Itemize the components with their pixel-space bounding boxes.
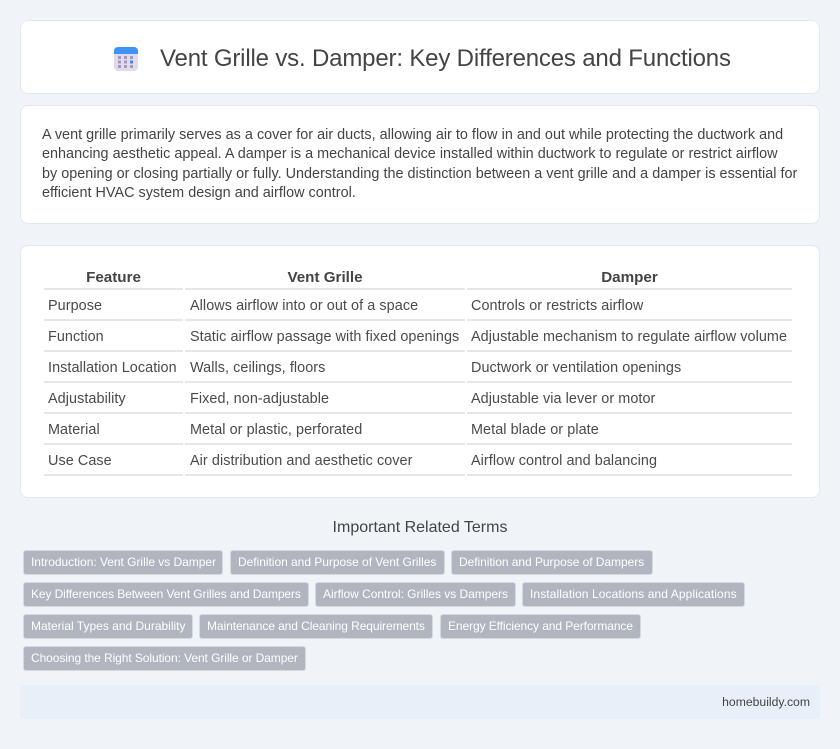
chip: Key Differences Between Vent Grilles and Dampers (31, 587, 301, 601)
chip (230, 550, 445, 575)
chip: Energy Efficiency and Performance (448, 619, 633, 633)
table row: Use Case: Air distribution and aesthetic cover (190, 453, 412, 469)
text block: introduction paragraph: enhancing aesthetic appeal. A damper is a mechanical device installed within ductwork to regulate or restrict airflow (42, 146, 778, 162)
table header: Feature: Feature (86, 269, 141, 286)
icon: calendar (114, 47, 138, 71)
chip (23, 550, 223, 575)
chip: Installation Locations and Applications (530, 587, 737, 601)
footer credit: homebuildy.com (722, 695, 810, 709)
text block: introduction paragraph: efficient HVAC system design and airflow control. (42, 185, 356, 201)
chip: Maintenance and Cleaning Requirements (207, 619, 425, 633)
heading: Important Related Terms: Important Related Terms (333, 519, 507, 536)
chip (451, 550, 653, 575)
chip: Material Types and Durability (31, 619, 186, 633)
footer bar (20, 685, 820, 719)
table row: Installation Location: Walls, ceilings, floors (190, 360, 325, 376)
chip (23, 646, 306, 671)
chip (23, 582, 309, 607)
chip (199, 614, 433, 639)
panel: comparison table (20, 245, 820, 498)
table row: Use Case: Use Case (48, 453, 112, 469)
table row: Installation Location: Installation Location (48, 360, 177, 376)
table row: Adjustability: Adjustability (48, 391, 126, 407)
chips: related terms (23, 550, 745, 671)
table row: Function: Function (48, 329, 104, 345)
chip (440, 614, 641, 639)
table row: Purpose: Allows airflow into or out of a space (190, 298, 418, 314)
table row: Adjustability: Adjustable via lever or motor (471, 391, 655, 407)
chip: Choosing the Right Solution: Vent Grille or Damper (31, 651, 298, 665)
table row: Material: Material (48, 422, 100, 438)
table row: Adjustability: Fixed, non-adjustable (190, 391, 329, 407)
title: Vent Grille vs. Damper: Key Differences and Functions (160, 45, 731, 72)
table row: Material: Metal blade or plate (471, 422, 599, 438)
panel: title header (20, 20, 820, 94)
chip (522, 582, 745, 607)
text block: introduction paragraph: by opening or closing partially or fully. Understanding the distinction between a vent grille and a damper is essential for (42, 166, 797, 182)
table header: Vent Grille: Vent Grille (287, 269, 363, 286)
table row: Purpose: Controls or restricts airflow (471, 298, 643, 314)
chip (23, 614, 193, 639)
chip: Definition and Purpose of Dampers (459, 555, 644, 569)
table row: Function: Static airflow passage with fixed openings (190, 329, 459, 345)
table row: Function: Adjustable mechanism to regulate airflow volume (471, 329, 787, 345)
chip: Definition and Purpose of Vent Grilles (238, 555, 436, 569)
chip: Airflow Control: Grilles vs Dampers (323, 587, 508, 601)
table row: Adjustability (48, 391, 656, 407)
table row: Material: Metal or plastic, perforated (190, 422, 362, 438)
chip: Introduction: Vent Grille vs Damper (31, 555, 216, 569)
table row: Purpose: Purpose (48, 298, 102, 314)
table row: Installation Location (48, 360, 681, 376)
text block: introduction paragraph (42, 126, 798, 201)
table row: Use Case (48, 453, 657, 469)
text block: introduction paragraph: A vent grille primarily serves as a cover for air ducts, allowing air to flow in and out while protecting the ductwork and (42, 126, 783, 142)
table row: Use Case: Airflow control and balancing (471, 453, 657, 469)
table row: Function (48, 329, 787, 345)
panel: introduction (20, 105, 820, 224)
table row: Installation Location: Ductwork or ventilation openings (471, 360, 681, 376)
table row: Material (48, 422, 599, 438)
table row: Purpose (48, 298, 644, 314)
chip (315, 582, 516, 607)
table header: Damper: Damper (601, 269, 658, 286)
